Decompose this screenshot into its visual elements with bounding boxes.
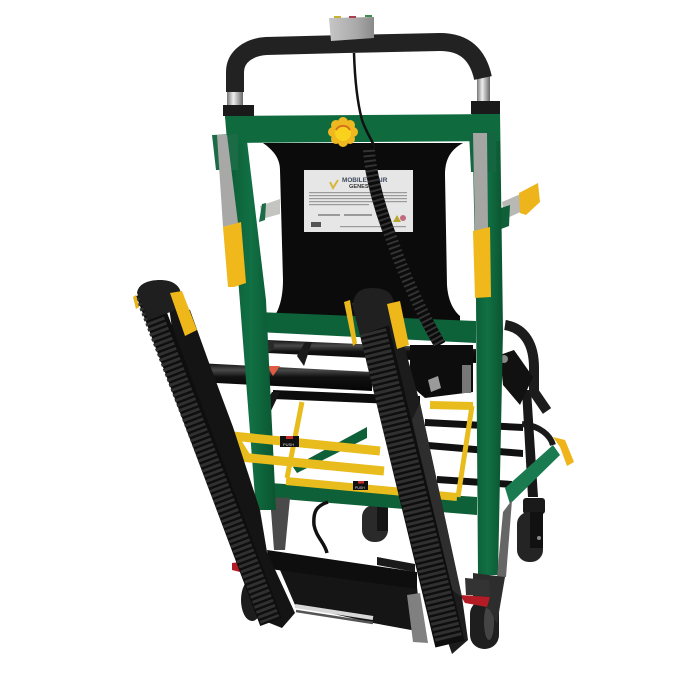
push tags: PUSH — [283, 442, 294, 447]
yellow carry frame — [232, 402, 473, 497]
green bottom frame — [270, 427, 560, 515]
coil cable — [354, 53, 440, 345]
green top bar — [225, 114, 500, 143]
lower tubes — [197, 340, 420, 438]
yellow grips — [223, 222, 491, 298]
handle posts — [223, 75, 500, 116]
upper black tube — [267, 340, 476, 363]
yellow knob — [328, 117, 358, 147]
wire — [314, 502, 328, 553]
seat label — [304, 170, 413, 232]
caster bracket left — [270, 497, 290, 550]
green frame left post — [225, 116, 276, 510]
slide rails and brackets — [212, 131, 496, 231]
yellow track tab — [170, 291, 197, 336]
handle bar — [235, 42, 483, 92]
green frame mid bar — [257, 312, 476, 343]
yellow side end — [553, 437, 574, 466]
push tags — [280, 436, 368, 490]
right track — [344, 288, 468, 654]
side arm stubs — [259, 183, 540, 229]
right bottom bracket and wheel — [232, 500, 512, 649]
rear frame: black rungs and strap — [425, 325, 553, 497]
yellow track tabs — [387, 301, 409, 349]
seat label: MOBILE STAIR — [342, 177, 388, 184]
seat back panel — [263, 143, 463, 326]
motor housing — [410, 345, 473, 398]
green frame right post — [472, 113, 503, 575]
lower crossbars and motor — [267, 550, 428, 643]
casters behind frame — [241, 498, 545, 621]
control box — [329, 15, 374, 41]
seat label: GENESIS — [349, 184, 374, 190]
push tags: PUSH — [355, 486, 365, 490]
left track — [133, 280, 295, 628]
